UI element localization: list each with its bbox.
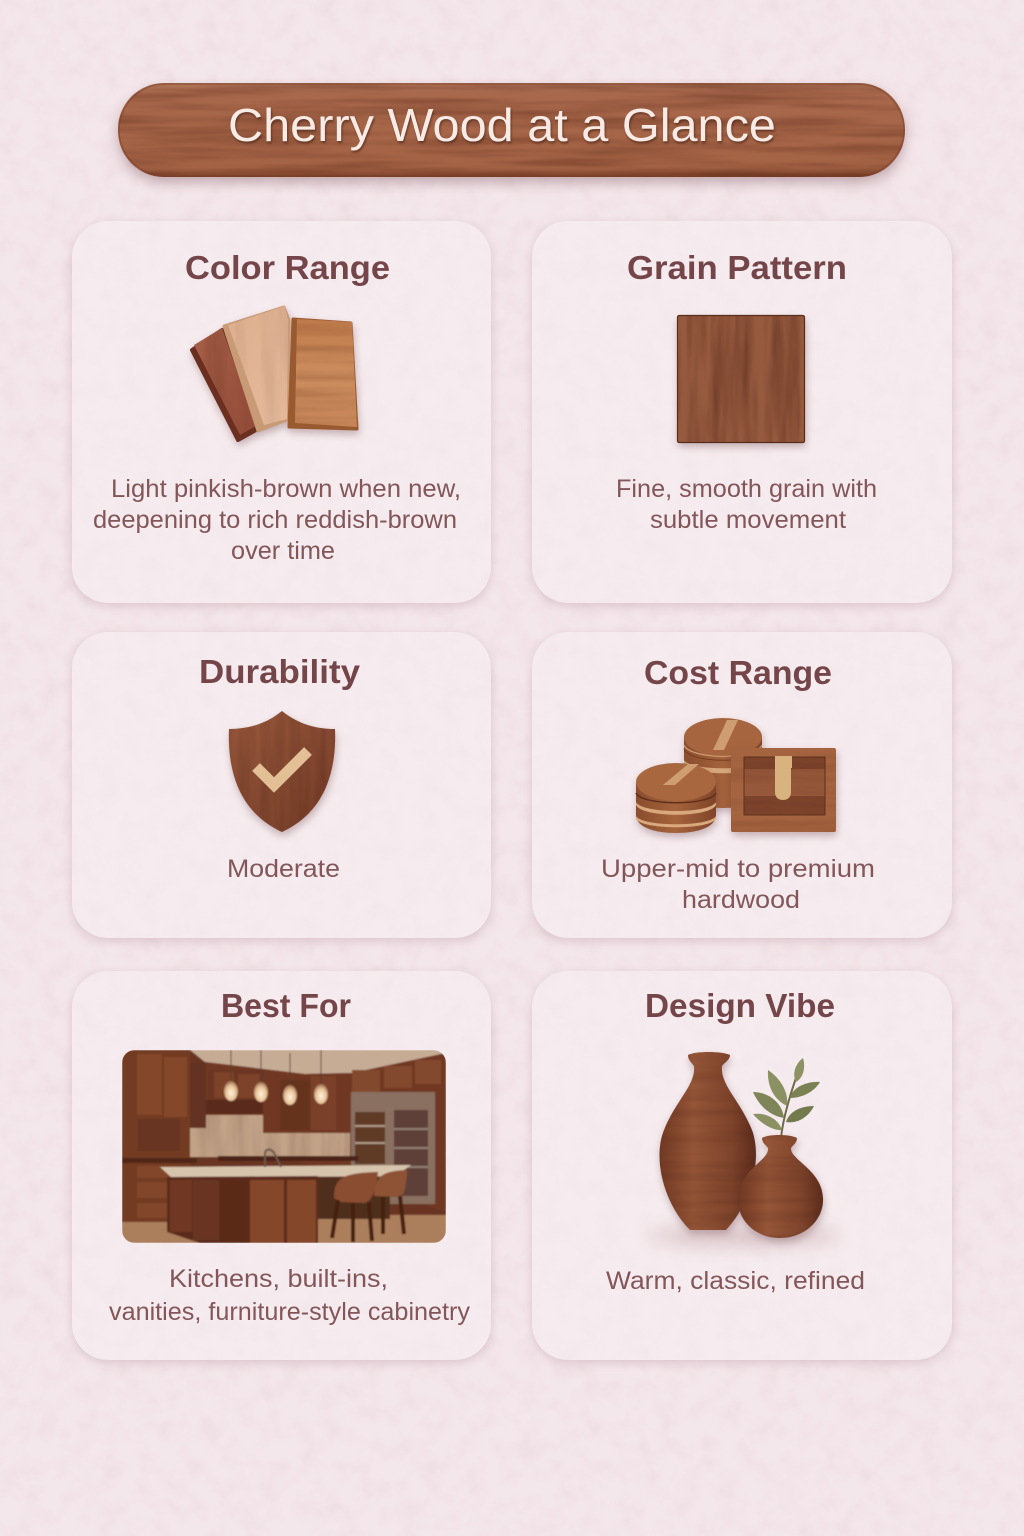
description: cost range: [601, 855, 875, 914]
heading: color range: Color Range: [185, 249, 390, 286]
panel: best for: [72, 971, 491, 1360]
heading: cost range: Cost Range: [644, 654, 832, 691]
icon: wooden shield with check: [229, 711, 335, 832]
title plaque: [118, 83, 905, 177]
description: color range: [93, 475, 461, 565]
heading: best for: Best For: [221, 987, 351, 1024]
description: grain pattern: Fine, smooth grain with: [616, 475, 877, 503]
icon: wooden coins and chest: [636, 718, 836, 833]
description: cost range: hardwood: [682, 886, 800, 914]
panel: color range: [72, 221, 491, 603]
icon: wood grain square: [677, 315, 805, 443]
panel: grain pattern: [532, 221, 952, 603]
icon: plant sprig: [753, 1058, 820, 1138]
icon: small vase: [738, 1135, 823, 1238]
description: color range: over time: [231, 537, 335, 565]
panel: durability: [72, 632, 491, 938]
heading: durability: Durability: [199, 653, 361, 690]
icon: front coin stack: [636, 763, 716, 833]
icon: back coin stack: [684, 718, 762, 808]
description: design vibe: Warm, classic, refined: [606, 1267, 865, 1295]
description: durability: Moderate: [227, 855, 340, 883]
panel: cost range: [532, 632, 952, 938]
description: grain pattern: subtle movement: [650, 506, 846, 534]
description: best for: vanities, furniture-style cabinetry: [109, 1298, 471, 1326]
icon: three wood swatches: [192, 306, 357, 440]
panel: design vibe: [532, 971, 952, 1360]
heading: grain pattern: Grain Pattern: [627, 249, 847, 286]
icon: brass latch: [775, 756, 792, 800]
description: color range: deepening to rich reddish-brown: [93, 506, 457, 534]
icon: wooden vases with plant: [650, 1052, 840, 1245]
title: Cherry Wood at a Glance: [228, 99, 776, 151]
illustration: cherry wood kitchen: [122, 1050, 446, 1243]
heading: design vibe: Design Vibe: [645, 987, 835, 1024]
icon: wooden chest: [731, 748, 836, 832]
description: grain pattern: [616, 475, 877, 534]
description: best for: Kitchens, built-ins,: [169, 1265, 388, 1293]
description: color range: Light pinkish-brown when new,: [111, 475, 461, 503]
icon: check mark: [256, 751, 308, 785]
description: cost range: Upper-mid to premium: [601, 855, 875, 883]
description: best for: [109, 1265, 471, 1326]
icon: tall vase: [659, 1052, 756, 1230]
